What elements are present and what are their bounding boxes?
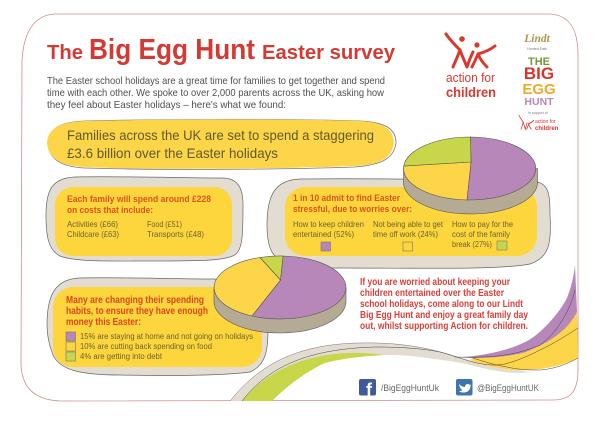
banner: 3.6 billion: Families across the UK are set to spend a staggering bbox=[67, 127, 374, 143]
pie chart: worries bbox=[403, 137, 538, 214]
logo: Lindt Big Egg Hunt: THE bbox=[528, 56, 550, 68]
banner: 3.6 billion: £3.6 billion over the Easter holidays bbox=[67, 145, 278, 161]
banner: 3.6 billion bbox=[47, 120, 396, 169]
panel: family costs: Food (£51) bbox=[147, 220, 182, 229]
panel: spending habits: Many are changing their spending bbox=[66, 295, 204, 306]
wave: green and grey ribbon bbox=[230, 343, 530, 401]
title: The bbox=[47, 42, 83, 64]
icon: facebook bbox=[359, 379, 376, 400]
logo: small action for children: children bbox=[535, 126, 559, 132]
panel: stressful Easter: time off work (24%) bbox=[373, 230, 438, 239]
intro text: they feel about Easter holidays – here's what we found: bbox=[47, 99, 286, 111]
intro text: The Easter school holidays are a great time for families to get together and spend bbox=[47, 75, 385, 87]
logo: action for children bbox=[446, 34, 496, 100]
callout text bbox=[360, 277, 528, 332]
logo: action for children: action for bbox=[446, 71, 495, 85]
panel: family costs: Activities (£66) bbox=[67, 220, 118, 229]
panel: spending habits: money this Easter: bbox=[66, 317, 141, 328]
panel: spending habits: 10% are cutting back spending on food bbox=[80, 342, 212, 351]
panel: stressful Easter: How to pay for the bbox=[452, 220, 514, 229]
title: Easter survey bbox=[262, 42, 396, 64]
panel: spending habits bbox=[47, 278, 268, 376]
pie chart: spending changes bbox=[214, 256, 346, 333]
panel: spending habits: habits, to ensure they have enough bbox=[66, 306, 208, 317]
title: Big Egg Hunt bbox=[89, 34, 255, 66]
panel: spending habits: 4% are getting into debt bbox=[80, 352, 163, 361]
logo: small action for children: action for bbox=[535, 119, 556, 125]
logo: Lindt Big Egg Hunt: HUNT bbox=[524, 96, 554, 108]
panel: family costs: Each family will spend around £228 bbox=[67, 194, 211, 205]
panel: spending habits: 15% are staying at home and not going on holidays bbox=[80, 332, 253, 341]
callout text: out, whilst supporting Action for children. bbox=[360, 321, 528, 332]
intro text bbox=[47, 75, 385, 111]
logo: Lindt Big Egg Hunt: Lindt bbox=[523, 33, 551, 45]
panel: stressful Easter: stressful, due to worries over: bbox=[293, 204, 412, 215]
panel: family costs: Childcare (£63) bbox=[67, 230, 119, 239]
panel: family costs bbox=[46, 177, 243, 261]
logo: Lindt Big Egg Hunt: EGG bbox=[522, 81, 556, 98]
logo: Lindt Big Egg Hunt: in support of bbox=[528, 111, 548, 115]
panel: stressful Easter: entertained (52%) bbox=[293, 230, 354, 239]
icon: facebook: f bbox=[366, 380, 373, 400]
twitter handle: @BigEggHuntUK bbox=[477, 383, 539, 393]
logo: Lindt Big Egg Hunt bbox=[522, 33, 556, 115]
callout text: children entertained over the Easter bbox=[360, 288, 504, 299]
panel: stressful Easter: break (27%) bbox=[452, 240, 492, 249]
logo: Lindt Big Egg Hunt: BIG bbox=[524, 64, 554, 83]
callout text: Big Egg Hunt and enjoy a great family day bbox=[360, 310, 528, 321]
wave: yellow ribbon bbox=[470, 312, 578, 370]
facebook handle: /BigEggHuntUk bbox=[381, 383, 439, 393]
panel: stressful Easter bbox=[267, 179, 550, 268]
wave: purple ribbon bbox=[453, 265, 577, 358]
panel: family costs: on costs that include: bbox=[67, 205, 153, 216]
callout text: school holidays, come along to our Lindt bbox=[360, 299, 524, 310]
panel: stressful Easter: Not being able to get bbox=[373, 220, 444, 229]
panel: stressful Easter: cost of the family bbox=[452, 230, 510, 239]
logo: small action for children bbox=[519, 115, 559, 132]
panel: family costs: Transports (£48) bbox=[147, 230, 204, 239]
wave: thin lines bbox=[230, 290, 578, 401]
logo: action for children: children bbox=[446, 85, 496, 100]
logo: Lindt Big Egg Hunt: Hunted Eats bbox=[527, 47, 547, 51]
panel: stressful Easter: How to keep children bbox=[293, 220, 364, 229]
panel: stressful Easter: 1 in 10 admit to find Easter bbox=[293, 193, 400, 204]
icon: twitter bbox=[456, 379, 472, 396]
intro text: time with each other. We spoke to over 2,000 parents across the UK, asking how bbox=[47, 87, 384, 99]
callout text: If you are worried about keeping your bbox=[360, 277, 510, 288]
